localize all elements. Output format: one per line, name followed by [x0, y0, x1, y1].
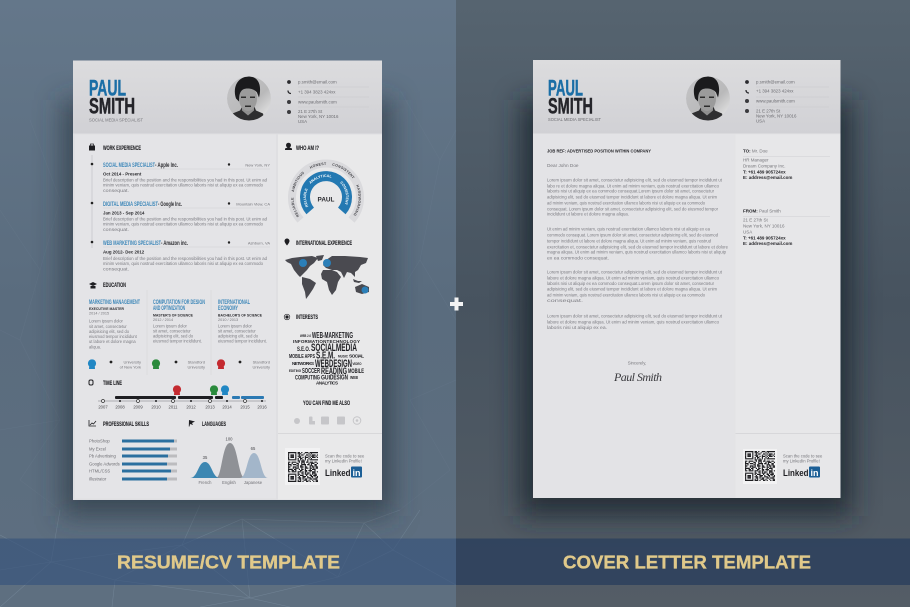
- letter body: [547, 178, 729, 330]
- letter body: ex ea commodo consequat.: [547, 256, 609, 260]
- contact block: [287, 80, 369, 124]
- sidebar: recipient: Dream Company Inc.: [743, 164, 786, 168]
- education column 3: [217, 299, 270, 370]
- job 3: [103, 240, 270, 272]
- job 3: WEB MARKETING SPECIALIST: [103, 240, 161, 247]
- icon: location pin: [284, 238, 290, 246]
- word cloud: SOCIAL: [349, 354, 364, 360]
- letter body: Ut enim ad minim veniam, quis nostrud exercitation ullamco laboris nisi ut aliquip ex ea: [547, 226, 711, 232]
- name: PAUL: [89, 76, 126, 100]
- education column 2: AND OPTIMIZATION: [153, 305, 185, 312]
- languages chart: English: [222, 480, 237, 485]
- divider and QR block: my LinkedIn Profile!: [783, 458, 820, 464]
- letter body: laboris nisi ut aliquip ex ea commodo consequat.Lorem ipsum dolor sit amet, consectetur: [547, 281, 715, 286]
- job 2: DIGITAL MEDIA SPECIALIST: [103, 201, 158, 208]
- caption band: right: COVER LETTER TEMPLATE: [563, 552, 811, 572]
- letter body: magna aliqua. Ut enim ad minim veniam, quis nostrud exercitation ullamco laboris nisi ut aliquip: [547, 250, 727, 254]
- education column 1: EXECUTIVE MASTER: [89, 307, 124, 311]
- word cloud: WEB-MARKETING: [312, 331, 353, 340]
- LinkedIn logo: in: [810, 468, 818, 478]
- word cloud: MOBILE APPS: [289, 354, 315, 360]
- icon: line chart: [89, 420, 96, 426]
- letter body: Lorem ipsum dolor sit amet, consectetur adipisicing elit, sed do eiusmod tempor incididunt ut: [547, 270, 723, 274]
- gauge chart: PAUL: [318, 196, 335, 204]
- resume sheet: [73, 60, 382, 500]
- world map: [285, 255, 369, 299]
- professional skills chart: Pb Advertising: [89, 454, 116, 458]
- letter body: laboris nisi ut aliquip ex ea commodo consequat.Lorem ipsum dolor sit amet, consectetur: [547, 188, 715, 194]
- word cloud: MOBILE: [348, 368, 364, 375]
- word cloud: SOCIALMEDIA: [311, 342, 357, 354]
- heading: interests: INTERESTS: [296, 314, 318, 321]
- languages chart: 65: [251, 446, 256, 451]
- contact block: USA: [298, 119, 307, 124]
- job 3: consequat.: [103, 266, 129, 272]
- contact block: www.paulsmith.com: [756, 98, 795, 104]
- contact block: p.smith@email.com: [756, 80, 795, 84]
- education column 1: adipisicing elit, sed do: [89, 329, 130, 334]
- job 3: Brief description of the position and the responsibilities you had in this post. Ut enim ad: [103, 256, 268, 261]
- letter body: ad minim veniam, quis nostrud exercitation ullamco laboris nisi ut aliquip ex ea commodo: [547, 200, 706, 206]
- professional skills chart: PhotoShop: [89, 438, 110, 444]
- word cloud: GUI: [321, 376, 330, 382]
- education column 1: MARKETING MANAGEMENT: [89, 299, 140, 306]
- sidebar: sender: 21 E 27th St: [743, 218, 769, 222]
- caption band: right: [456, 538, 910, 585]
- gauge chart: HONEST: [310, 162, 326, 169]
- sidebar: recipient: T: +61 489 905724xx: [743, 170, 786, 174]
- word cloud: READING: [321, 366, 347, 376]
- letter body: ad minim veniam, quis nostrud exercitation ullamco laboris nisi ut aliquip ex ea commodo: [547, 292, 706, 298]
- panel: work experience: [89, 144, 270, 272]
- job 2: - Google Inc.: [158, 201, 182, 208]
- job 1: [103, 162, 270, 193]
- sidebar: sender: E: address@email.com: [743, 241, 792, 246]
- sidebar: recipient: HR Manager: [743, 158, 769, 162]
- word cloud: ANALYTICS: [316, 380, 338, 386]
- word cloud: WEB 2.0: [300, 333, 312, 338]
- portrait photo: [686, 76, 730, 122]
- letter heading: JOB REF: ADVERTISED POSITION WITHIN COMPANY: [547, 148, 652, 154]
- professional skills chart: My Excel: [89, 446, 106, 452]
- icon: person: [285, 143, 292, 150]
- icon: briefcase: [89, 144, 95, 150]
- gauge chart: RELIABLE: [304, 188, 308, 208]
- letter body: labore et dolore magna aliqua. Ut enim ad minim veniam, quis nostrud exercitation ullamco: [547, 276, 720, 280]
- LinkedIn logo: in: [352, 468, 360, 478]
- word cloud: WEBDESIGN: [315, 358, 352, 370]
- professional skills chart: Google Adwords: [89, 462, 120, 466]
- education column 2: Lorem ipsum dolor: [153, 324, 188, 328]
- education column 2: MASTER'S OF SCIENCE: [153, 314, 193, 318]
- timeline: 2012: [186, 404, 196, 410]
- QR code: [745, 452, 775, 480]
- sign-off: Sincerely,: [628, 360, 646, 366]
- sheet shadows: [62, 100, 852, 516]
- timeline: 2009: [133, 404, 143, 410]
- gauge chart: [288, 160, 364, 222]
- education column 1: sit amet, consectetur: [89, 324, 127, 329]
- word cloud: COMPUTING: [295, 374, 320, 382]
- education column 3: Lorem ipsum dolor: [218, 324, 253, 328]
- heading: languages: LANGUAGES: [202, 421, 226, 428]
- name: PAUL: [548, 76, 583, 100]
- letter body: commodo consequat. Lorem ipsum dolor sit amet, consectetur adipisicing elit, sed do eiusmod: [547, 232, 719, 238]
- education column 2: 2012 / 2014: [153, 318, 173, 322]
- professional skills chart: HTML/CSS: [89, 468, 110, 474]
- education column 2: sit amet, consectetur: [153, 328, 191, 334]
- social heading: YOU CAN FIND ME ALSO: [303, 400, 350, 407]
- name: SMITH: [548, 94, 593, 118]
- word cloud: INFORMATIONTECHNOLOGY: [293, 339, 360, 344]
- job 1: SOCIAL MEDIA SPECIALIST: [103, 162, 155, 169]
- job 3: Aug 2012- Dec 2012: [103, 250, 145, 254]
- sidebar: sender: FROM: Paul Smith: [743, 208, 781, 214]
- background: left panel: [0, 0, 456, 607]
- education column 3: BACHELOR'S OF SCIENCE: [218, 314, 262, 318]
- education column 3: University: [252, 364, 270, 370]
- word cloud: EDITING: [289, 369, 301, 373]
- LinkedIn logo: [325, 466, 362, 478]
- word cloud: [289, 331, 364, 386]
- job 2: consequat.: [103, 227, 129, 232]
- languages chart: Japanese: [244, 480, 263, 485]
- education column 3: ECONOMY: [218, 305, 238, 312]
- gauge chart: HARDWORKING: [354, 184, 361, 216]
- divider and QR block: my LinkedIn Profile!: [325, 458, 362, 464]
- letter body: tempor incididunt ut labore et dolore magna aliqua. Ut enim ad minim veniam, quis nostrud: [547, 238, 712, 244]
- letter body: labore et dolore magna aliqua. Ut enim ad minim veniam, quis nostrud exercitation ullamco: [547, 320, 720, 324]
- sidebar: sender: New York, NY 10016: [743, 224, 785, 228]
- languages chart: French: [198, 480, 212, 485]
- LinkedIn logo: Linked: [325, 468, 350, 478]
- contact block: www.paulsmith.com: [298, 100, 337, 104]
- name: [89, 76, 135, 118]
- education column 3: INTERNATIONAL: [218, 299, 250, 306]
- education column 1: of New York: [120, 364, 141, 370]
- icon: graduation cap: [89, 282, 97, 288]
- heading: work experience: WORK EXPERIENCE: [103, 145, 141, 152]
- timeline: [89, 380, 267, 410]
- timeline: 2014: [222, 404, 232, 410]
- letter body: incididunt ut labore et dolore magna aliqua.: [547, 212, 629, 216]
- languages chart: 100: [226, 436, 233, 442]
- education column 3: Standford: [253, 360, 270, 364]
- education column 1: ut labore et dolore magna: [89, 339, 136, 344]
- panel: education: [88, 282, 270, 375]
- panel: interests: [284, 314, 364, 424]
- education column 1: aliqua.: [89, 344, 101, 350]
- letter body: Lorem ipsum dolor sit amet, consectetur adipisicing elit, sed do eiusmod tempor incididunt ut: [547, 178, 723, 182]
- job 1: consequat.: [103, 188, 129, 193]
- panel: international experience: [284, 238, 369, 299]
- education column 2: Standford: [188, 360, 205, 364]
- contact block: USA: [756, 118, 765, 124]
- social icons: [294, 416, 361, 424]
- letter body: consequat.: [547, 298, 583, 303]
- job 2: minim veniam, quis nostrud exercitation ullamco laboris nisi ut aliquip ex ea commodo: [103, 222, 264, 226]
- LinkedIn logo: Linked: [783, 468, 808, 478]
- contact block: +1 394 3823 424xx: [298, 90, 336, 94]
- gauge chart: ANALYTICAL: [310, 174, 332, 184]
- sidebar: sender: T: +61 489 905724xx: [743, 236, 786, 240]
- caption band: left: RESUME/CV TEMPLATE: [117, 552, 340, 572]
- professional skills chart: [89, 420, 177, 482]
- contact block: p.smith@email.com: [298, 80, 337, 84]
- job 3: minim veniam, quis nostrud exercitation ullamco laboris nisi ut aliquip ex ea commodo: [103, 261, 264, 266]
- job 1: Brief description of the position and the responsibilities you had in this post. Ut enim ad: [103, 178, 268, 182]
- tagline: SOCIAL MEDIA SPECIALIST: [548, 117, 601, 122]
- word cloud: VIDEO: [352, 362, 362, 366]
- timeline: 2010: [151, 404, 161, 410]
- name: [548, 76, 593, 118]
- letter body: adipisicing elit, sed do eiusmod tempor incididunt ut labore et dolore magna aliqua. Ut enim: [547, 194, 717, 200]
- panel: who am i: [285, 142, 364, 222]
- timeline: 2016: [257, 404, 267, 410]
- job 1: minim veniam, quis nostrud exercitation ullamco laboris nisi ut aliquip ex ea commodo: [103, 182, 264, 188]
- divider and QR block: Scan the code to see: [783, 454, 823, 458]
- contact block: 21 E 27th St: [298, 109, 323, 114]
- education column 3: eiusmod tempor incididunt.: [218, 338, 267, 344]
- sidebar: sender: USA: [743, 230, 752, 234]
- salutation: Dear John Doe: [547, 163, 579, 168]
- job 2: Brief description of the position and the responsibilities you had in this post. Ut enim ad: [103, 216, 268, 222]
- contact block: New York, NY 10016: [298, 114, 339, 119]
- job 1: New York, NY: [245, 162, 270, 168]
- cover letter sheet: [533, 60, 840, 498]
- job 1: - Apple Inc.: [155, 162, 178, 169]
- word cloud: S.E.O.: [297, 346, 310, 353]
- professional skills chart: Illustrator: [89, 476, 107, 482]
- word cloud: DESIGN: [330, 374, 348, 382]
- letter body: Lorem ipsum dolor sit amet, consectetur adipisicing elit, sed do eiusmod tempor incididunt ut: [547, 314, 723, 318]
- heading: education: EDUCATION: [103, 282, 126, 289]
- name: SMITH: [89, 94, 135, 118]
- letter body: exercitation et, consectetur adipisicing elit, sed do eiusmod tempor incididunt ut labore et dolore: [547, 244, 729, 250]
- education column 2: eiusmod tempor incididunt.: [153, 338, 202, 344]
- timeline: 2013: [205, 404, 215, 410]
- word cloud: MUSIC: [338, 354, 348, 358]
- word cloud: SOCCER: [302, 368, 320, 375]
- contact block: 21 E 27th St: [756, 108, 781, 114]
- LinkedIn logo: [783, 466, 820, 478]
- signature: Paul Smith: [613, 370, 662, 384]
- letter body: laboris nisi ut aliquip ex ea.: [547, 325, 607, 330]
- gauge chart: CONSISTENT: [332, 163, 355, 178]
- languages chart: [189, 420, 268, 485]
- letter body: adipisicing elit, sed do eiusmod tempor incididunt ut labore et dolore magna aliqua. Ut enim: [547, 286, 717, 292]
- background: right panel: [456, 0, 910, 607]
- languages chart: 35: [203, 455, 208, 460]
- education column 2: [152, 299, 205, 370]
- divider and QR block: [736, 434, 840, 484]
- education column 1: [88, 299, 141, 370]
- plus sign: [450, 298, 463, 310]
- job 1: Oct 2014 - Present: [103, 172, 142, 176]
- timeline: 2015: [240, 404, 250, 410]
- heading: time line: TIME LINE: [103, 380, 122, 387]
- heading: international experience: INTERNATIONAL EXPERIENCE: [296, 240, 352, 247]
- education column 2: adipisicing elit, sed do: [153, 334, 194, 338]
- contact block: New York, NY 10016: [756, 114, 797, 118]
- word cloud: WEB: [350, 375, 359, 380]
- gauge chart: AMBITIOUS: [292, 172, 304, 192]
- education column 1: 2014 / 2015: [89, 312, 109, 316]
- education column 2: University: [187, 364, 205, 370]
- letter body: consequat. Lorem ipsum dolor sit amet, consectetur adipisicing elit, sed do eiusmod tempor: [547, 206, 719, 212]
- timeline: 2008: [115, 404, 125, 410]
- icon: watch: [89, 380, 93, 385]
- tagline: SOCIAL MEDIA SPECIALIST: [89, 118, 143, 122]
- education column 3: 2010 / 2013: [218, 318, 238, 322]
- job 3: - Amazon inc.: [161, 240, 188, 247]
- education column 3: sit amet, consectetur: [218, 328, 256, 334]
- heading: who am i: WHO AM I?: [296, 145, 319, 152]
- gauge chart: RELIABLE: [291, 198, 300, 218]
- caption band: left: [0, 538, 456, 585]
- gauge chart: CONSISTENT: [340, 182, 349, 206]
- timeline: 2007: [98, 404, 108, 410]
- job 3: Ashburn, VA: [248, 240, 270, 246]
- sidebar: recipient: [743, 148, 830, 180]
- word cloud: S.E.M.: [316, 350, 335, 362]
- portrait photo: [227, 76, 271, 122]
- sidebar: recipient: E: address@email.com: [743, 175, 792, 180]
- education column 1: eiusmod tempor incididunt: [89, 334, 138, 339]
- divider and QR block: Scan the code to see: [325, 454, 365, 458]
- sidebar: sender: [743, 208, 830, 246]
- education column 1: University: [123, 360, 141, 364]
- job 2: Mountain View, CA: [236, 202, 270, 206]
- contact block: +1 394 3823 424xx: [756, 88, 794, 94]
- contact block: [745, 80, 829, 124]
- word cloud: NETWORKS: [292, 361, 314, 366]
- education column 1: Lorem ipsum dolor: [89, 318, 124, 324]
- heading: professional skills: PROFESSIONAL SKILLS: [103, 421, 149, 428]
- icon: target: [284, 314, 290, 320]
- QR code: [288, 453, 318, 481]
- letter body: labo re et dolore magna aliqua. Ut enim ad minim veniam, quis nostrud exercitation ullamco: [547, 184, 720, 188]
- education column 3: adipisicing elit, sed do: [218, 334, 259, 338]
- job 2: [103, 201, 270, 232]
- icon: flag: [189, 420, 195, 426]
- sidebar: recipient: TO: Mr. Doe: [743, 148, 768, 154]
- education column 2: COMPUTATION FOR DESIGN: [153, 299, 205, 306]
- divider and QR block: [278, 434, 382, 485]
- job 2: Jan 2013 - Sep 2014: [103, 210, 145, 216]
- timeline: 2011: [168, 404, 178, 410]
